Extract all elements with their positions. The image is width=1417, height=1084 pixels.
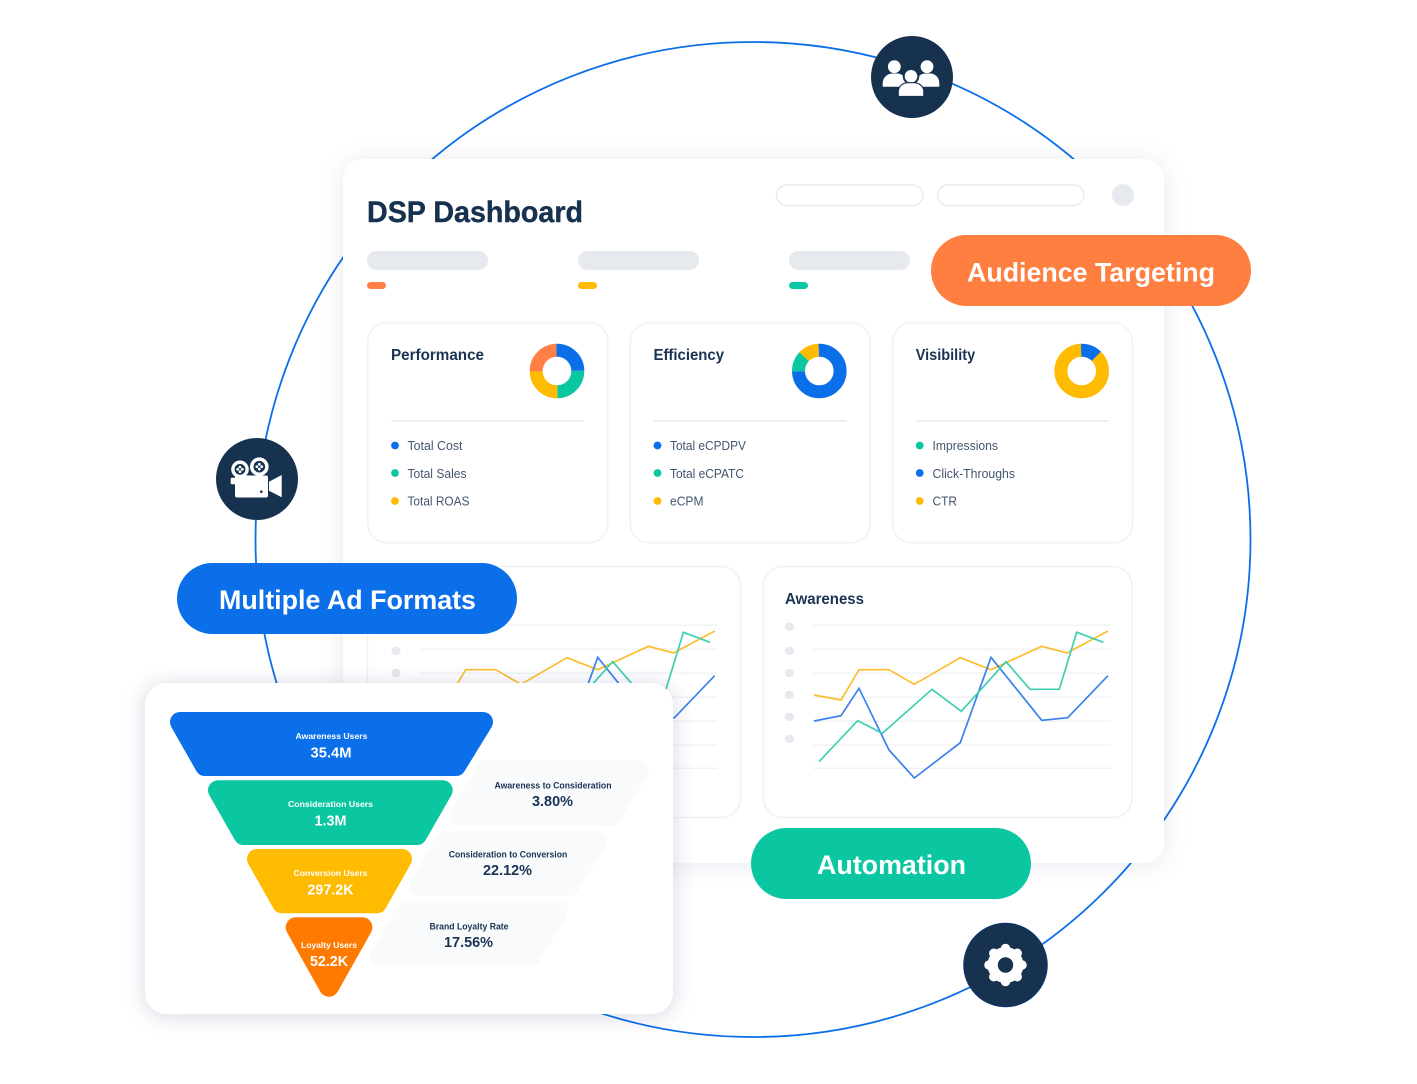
orbit ring	[256, 42, 1250, 1037]
pill: Audience Targeting: Audience Targeting	[967, 258, 1215, 288]
panel: funnel card	[145, 683, 673, 1014]
funnel stage: Conversion Users: 297.2K	[308, 882, 354, 898]
legend: efficiency: Total eCPDPV	[670, 439, 747, 453]
rate: Awareness to Consideration: 3.80%	[532, 794, 573, 810]
icon: gear	[964, 924, 1047, 1006]
rate: Consideration to Conversion	[419, 841, 597, 886]
icon: video camera	[216, 438, 298, 520]
legend: efficiency: eCPM	[670, 494, 704, 508]
legend: performance: Total Cost	[408, 439, 463, 453]
funnel stage: Awareness Users: Awareness Users	[296, 731, 368, 741]
funnel stage: Consideration Users	[218, 790, 443, 835]
funnel stage: Loyalty Users: Loyalty Users	[301, 940, 357, 950]
KPI placeholders	[367, 251, 910, 289]
panel: Awareness line chart: Awareness	[785, 591, 864, 608]
panel: Efficiency	[630, 323, 870, 543]
rate: Brand Loyalty Rate: 17.56%	[444, 935, 493, 951]
funnel stage: Conversion Users: Conversion Users	[294, 868, 368, 878]
legend: visibility: Impressions	[932, 439, 998, 453]
panel: Awareness line chart	[764, 566, 1132, 818]
legend: efficiency: Total eCPATC	[670, 467, 744, 481]
pill: Multiple Ad Formats: Multiple Ad Formats	[219, 585, 476, 615]
legend: visibility	[916, 439, 1015, 508]
funnel stage: Conversion Users	[257, 859, 402, 903]
panel: Visibility	[892, 323, 1132, 543]
line series	[814, 631, 1108, 778]
chart grid	[813, 625, 1111, 768]
legend: visibility: CTR	[932, 494, 957, 508]
panel: left line chart	[368, 566, 740, 818]
pill: Audience Targeting	[931, 235, 1251, 306]
rate: Awareness to Consideration: Awareness to Consideration	[494, 780, 612, 790]
axis placeholders	[391, 647, 401, 677]
funnel stage: Awareness Users: 35.4M	[310, 746, 352, 762]
donut: visibility	[1061, 350, 1102, 392]
rate: Brand Loyalty Rate	[380, 911, 558, 957]
legend: visibility: Click-Throughs	[932, 467, 1015, 481]
panel: Efficiency: Efficiency	[654, 347, 724, 364]
funnel stage: Loyalty Users	[296, 927, 362, 987]
legend: efficiency	[654, 439, 747, 508]
axis placeholders	[785, 622, 794, 743]
panel: Visibility: Visibility	[916, 347, 976, 364]
legend: performance: Total ROAS	[408, 494, 470, 508]
pill: Automation: Automation	[817, 850, 966, 880]
legend: performance: Total Sales	[408, 467, 466, 481]
line series	[421, 631, 715, 778]
funnel stage: Consideration Users: 1.3M	[314, 814, 346, 830]
pill: Automation	[751, 828, 1031, 899]
funnel stage: Loyalty Users: 52.2K	[310, 954, 349, 970]
donut: efficiency	[798, 350, 840, 392]
pill: Multiple Ad Formats	[177, 563, 517, 634]
funnel stage: Consideration Users: Consideration Users	[288, 799, 373, 809]
panel: Performance: Performance	[391, 347, 484, 364]
rate: Consideration to Conversion: 22.12%	[483, 863, 532, 879]
rate: Brand Loyalty Rate: Brand Loyalty Rate	[430, 922, 509, 932]
rate: Consideration to Conversion: Consideration to Conversion	[449, 850, 567, 860]
rate: Awareness to Consideration	[460, 770, 639, 816]
panel: main dashboard	[343, 159, 1164, 863]
title: DSP Dashboard	[367, 196, 583, 229]
panel: Performance	[368, 323, 608, 543]
funnel stage: Awareness Users	[180, 722, 483, 766]
icon: audience group	[871, 36, 953, 118]
chart grid	[420, 625, 717, 768]
legend: performance	[391, 439, 470, 508]
donut: performance	[536, 350, 578, 392]
header controls	[776, 184, 1134, 206]
